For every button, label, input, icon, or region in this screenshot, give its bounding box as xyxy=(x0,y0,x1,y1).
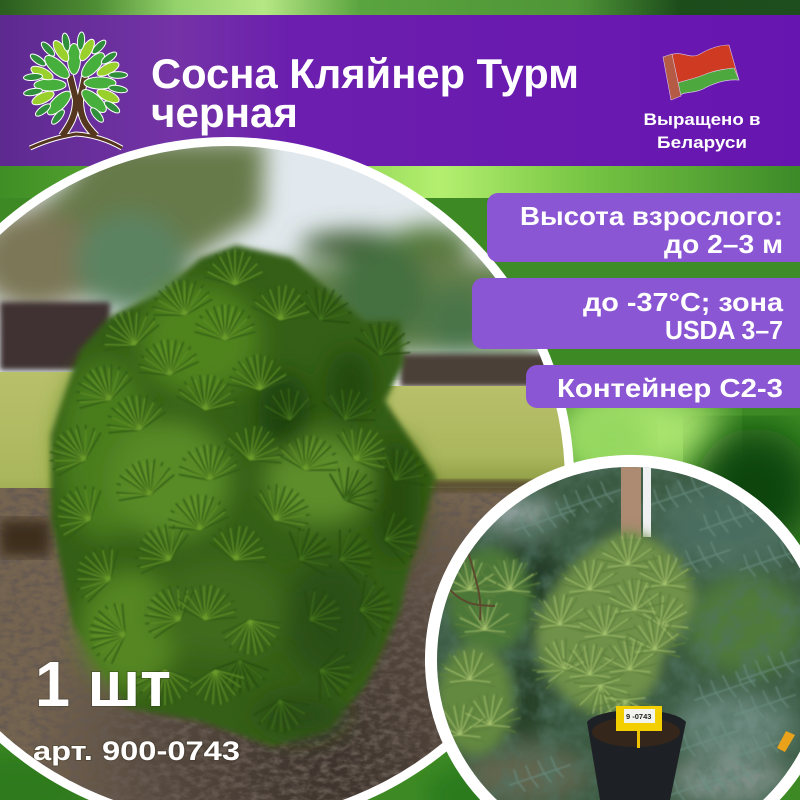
photo background xyxy=(0,140,580,800)
yellow plant tag xyxy=(616,706,662,748)
header band: черная xyxy=(151,89,298,136)
small photo: seedling in pot xyxy=(425,455,800,800)
panel: height: Высота взрослого: xyxy=(520,201,783,231)
logo: tree xyxy=(23,32,128,148)
quantity label: 1 шт xyxy=(35,648,171,720)
panel: container: Контейнер С2-3 xyxy=(557,373,783,403)
tree trunk and roots xyxy=(30,76,122,148)
seedling pine xyxy=(529,524,699,718)
panel: frost hardiness: до -37°C; зона xyxy=(583,287,784,317)
panel: frost hardiness xyxy=(472,278,800,349)
panel: frost hardiness: USDA 3–7 xyxy=(665,315,783,345)
article number: арт. 900-0743 xyxy=(33,736,240,766)
main photo: pine in garden xyxy=(0,137,580,800)
panel: height xyxy=(487,193,800,262)
left pine branches xyxy=(430,548,540,755)
black pot xyxy=(587,710,686,800)
panel: container xyxy=(526,365,800,408)
caption: grown in Belarus: Выращено в xyxy=(644,110,760,129)
pine bush xyxy=(39,245,436,746)
spruce background xyxy=(437,467,800,800)
caption: grown in Belarus: Беларуси xyxy=(657,133,747,152)
caption: grown in Belarus xyxy=(644,110,760,152)
header band xyxy=(0,15,800,166)
stake and measuring tape xyxy=(621,467,651,539)
icon: Belarus flag xyxy=(663,45,739,100)
orange secateurs handle xyxy=(777,731,795,752)
panel: height: до 2–3 м xyxy=(664,229,783,259)
yellow plant tag: 9 -0743 xyxy=(626,712,651,721)
title: Сосна Кляйнер Турм xyxy=(151,50,579,97)
